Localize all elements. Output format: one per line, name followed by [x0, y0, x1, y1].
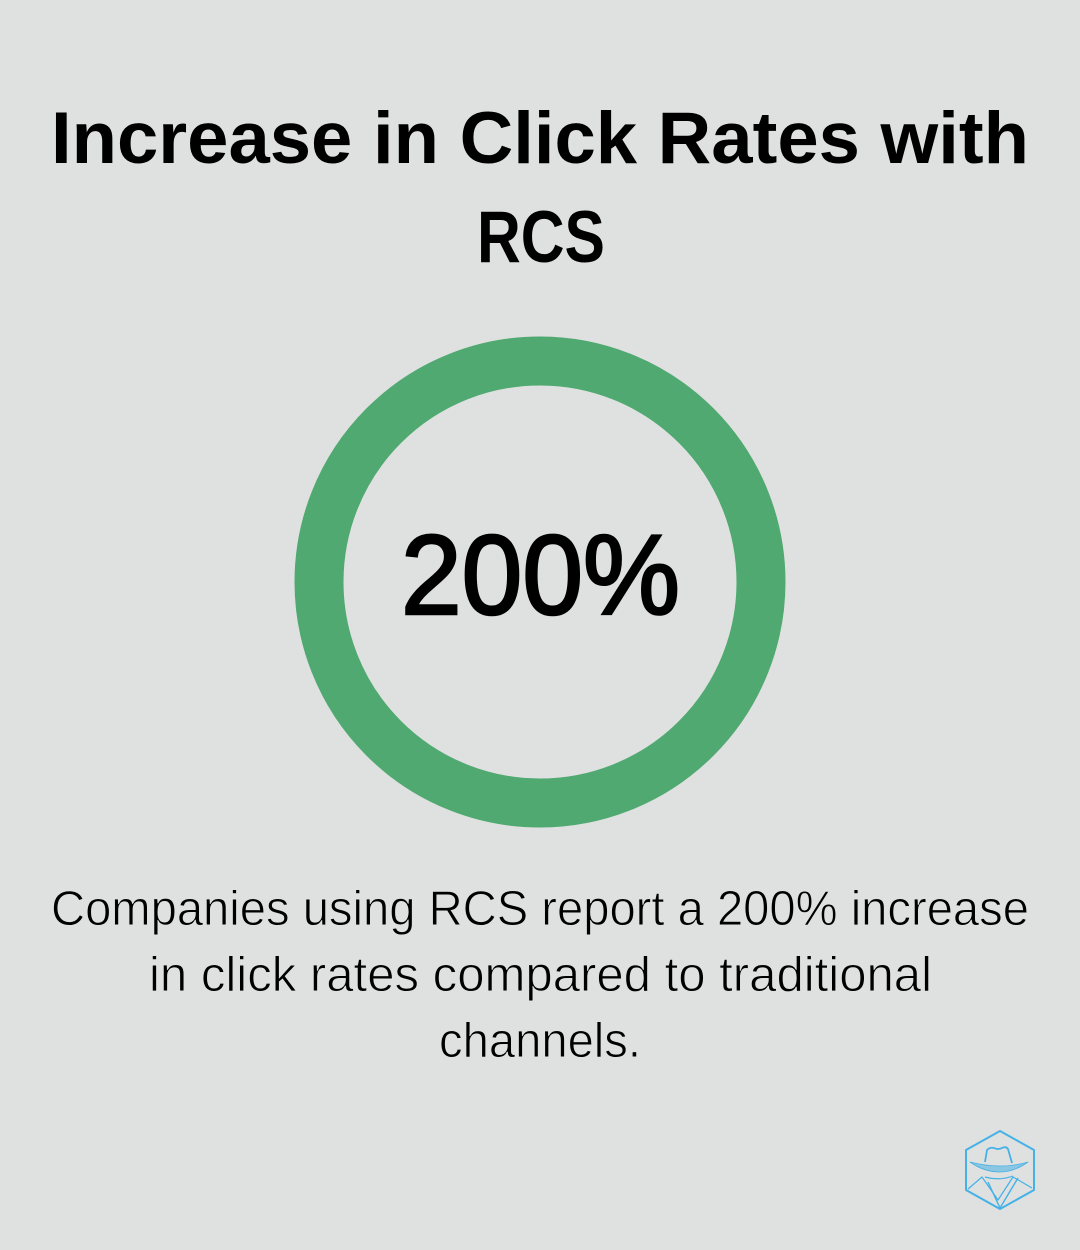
title: RCS	[477, 197, 605, 278]
description	[51, 882, 1029, 1068]
ring chart	[319, 361, 761, 803]
description: in click rates compared to traditional	[149, 948, 932, 1002]
title	[51, 98, 1029, 278]
description: channels.	[439, 1014, 641, 1068]
description: Companies using RCS report a 200% increase	[51, 882, 1029, 936]
title: Increase in Click Rates with	[51, 98, 1029, 179]
value: 200%: 200%	[401, 512, 680, 638]
icon: logo hexagon with hat	[966, 1131, 1034, 1209]
